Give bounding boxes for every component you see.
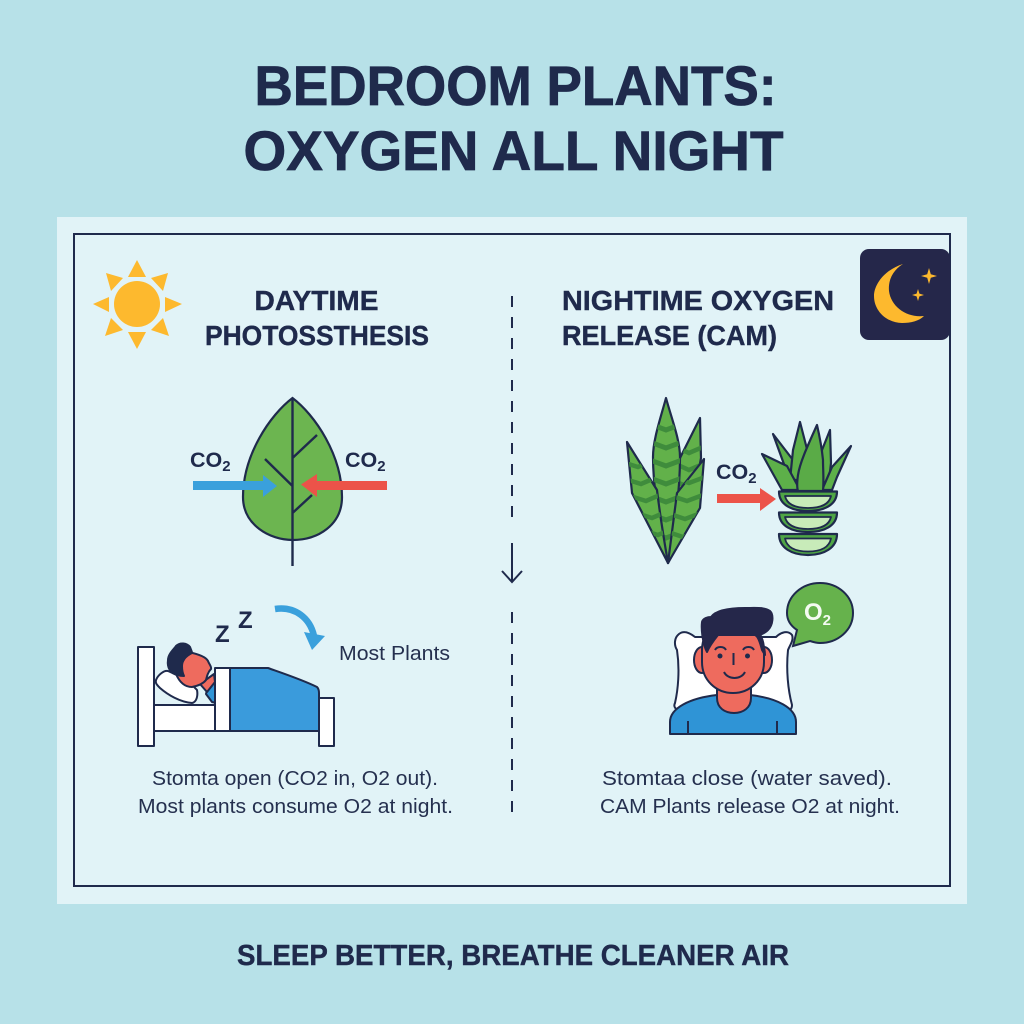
arrow: blue CO2 in: 2 xyxy=(222,458,231,475)
icon: snake plant xyxy=(622,398,705,563)
arrow: blue CO2 in: CO xyxy=(190,448,222,472)
text: right caption xyxy=(600,767,900,818)
text: left caption: Stomta open (CO2 in, O2 out). xyxy=(152,767,438,790)
text: right caption: CAM Plants release O2 at night. xyxy=(600,795,900,818)
text: left caption: Most plants consume O2 at night. xyxy=(138,795,453,818)
arrow: red CO2: CO xyxy=(345,448,377,472)
icon: awake person xyxy=(670,608,796,734)
center dashed divider xyxy=(502,296,522,820)
title: BEDROOM PLANTS: xyxy=(254,54,776,117)
title: OXYGEN ALL NIGHT xyxy=(244,119,784,182)
heading: daytime: DAYTIME xyxy=(254,285,378,316)
arrow: red CO2 to aloe: CO xyxy=(716,460,748,484)
text: right caption: Stomtaa close (water saved). xyxy=(602,767,892,790)
footer tagline: SLEEP BETTER, BREATHE CLEANER AIR xyxy=(237,940,789,972)
icon: aloe plant xyxy=(762,422,851,555)
panel: main card xyxy=(57,217,967,904)
arrow: red CO2 to aloe: 2 xyxy=(748,470,757,487)
icon: sun xyxy=(93,260,182,349)
arrow: red CO2 to aloe xyxy=(716,460,776,511)
icon: sleeping person in bed xyxy=(138,643,334,746)
title xyxy=(244,54,784,182)
sleep Zs xyxy=(215,607,253,648)
heading: nighttime: RELEASE (CAM) xyxy=(562,320,777,351)
label: most plants: Most Plants xyxy=(339,643,450,665)
heading: daytime xyxy=(205,285,429,351)
icon: O2 speech bubble: 2 xyxy=(823,612,831,629)
sleep Zs: Z xyxy=(238,607,253,634)
heading: daytime: PHOTOSSTHESIS xyxy=(205,320,429,351)
icon: leaf xyxy=(243,398,342,566)
arrow: curved blue xyxy=(275,609,325,650)
arrow: blue CO2 in xyxy=(190,448,277,497)
icon: O2 speech bubble: O xyxy=(804,599,823,626)
text: left caption xyxy=(138,767,453,818)
heading: nighttime xyxy=(562,285,834,351)
icon: O2 speech bubble xyxy=(787,583,853,646)
sleep Zs: Z xyxy=(215,621,230,648)
icon: moon badge xyxy=(860,249,950,340)
arrow: red CO2 xyxy=(301,448,387,497)
arrow: red CO2: 2 xyxy=(377,458,386,475)
heading: nighttime: NIGHTIME OXYGEN xyxy=(562,285,834,316)
